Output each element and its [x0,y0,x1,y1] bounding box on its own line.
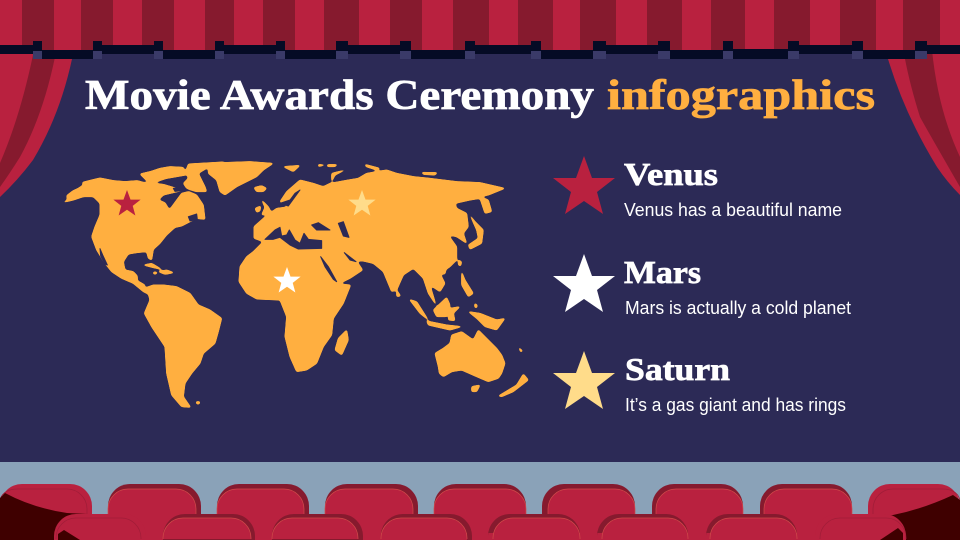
stage floor [0,462,960,540]
heading: Saturn: Saturn [625,351,730,387]
legend: Saturn [553,351,846,415]
heading: Mars: Mars [624,254,701,290]
heading: Venus: Venus [624,156,718,192]
map: Baja California channel and Gulf of St Lawrence [100,187,197,265]
curtain rail [0,41,960,59]
seats: front row [54,514,906,540]
title: infographics [607,73,875,119]
map star: red [113,190,141,216]
map star: white [273,267,301,293]
icon: yellow star [553,351,615,409]
map star: yellow [348,190,376,216]
text: Saturn description: It’s a gas giant and has rings [625,395,846,415]
top curtain valance [0,0,960,50]
right stage curtain [886,50,960,195]
map: inland seas [265,190,356,282]
map: land masses [63,162,528,407]
title: Movie Awards Ceremony [85,73,594,119]
text: Mars description: Mars is actually a cold planet [625,298,851,318]
left stage curtain [0,50,74,197]
seats: left shadow [0,493,87,540]
legend: Venus [553,156,842,220]
icon: red star [553,156,615,214]
seats: floor band [0,514,960,540]
cinema seats [0,484,960,540]
legend: Mars [553,254,851,318]
map: Africa and Eurasia [239,164,528,397]
map: Americas and Greenland [63,162,273,407]
text: Venus description: Venus has a beautiful name [624,200,842,220]
seats: right shadow [860,495,960,540]
world map [63,162,528,407]
icon: white star [553,254,615,312]
seats: back row [0,484,960,539]
